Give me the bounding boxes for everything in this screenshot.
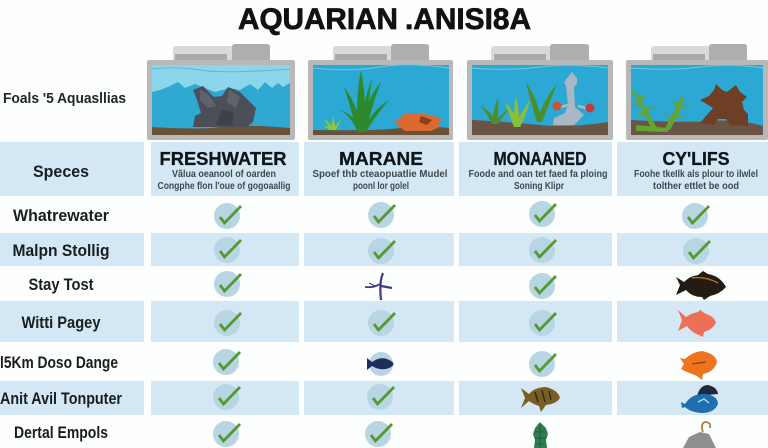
row label: aquarium row: Foals '5 Aquasllias — [3, 91, 126, 107]
column header: monaned: MONAANED — [494, 149, 586, 169]
column header: monaned — [468, 149, 608, 192]
row labels: Dertal Empols — [14, 424, 108, 442]
icon: purple creature — [365, 273, 392, 300]
column header: freshwater — [158, 149, 290, 192]
icon: black fish — [676, 271, 726, 300]
column header: cylifs — [634, 149, 758, 192]
icon: green plant — [533, 422, 548, 448]
row labels: l5Km Doso Dange — [0, 354, 118, 372]
aquarium: monaned — [467, 44, 613, 140]
column header: cylifs: tolther ettlet be ood — [653, 181, 739, 192]
row labels: Witti Pagey — [22, 314, 101, 332]
column header: freshwater: Congphe flon l'oue of gogoaallig — [158, 181, 290, 192]
checks: freshwater column — [213, 203, 241, 447]
column header: marine: Spoef thb cteaopuatlie Mudel — [312, 169, 448, 180]
checks: monaned column — [529, 201, 556, 377]
column header: marine — [312, 149, 448, 192]
column header: marine: MARANE — [339, 149, 423, 169]
title: .ANISI8A — [405, 3, 531, 36]
row labels: Stay Tost — [28, 276, 94, 294]
column header: monaned: Foode and oan tet faed fa ploing — [468, 169, 608, 180]
icon: dark blue fish — [367, 352, 394, 376]
icon: brown fish — [521, 387, 560, 412]
icon: coral fish — [678, 310, 716, 337]
icon: orange fish — [680, 351, 717, 380]
column header: monaned: Soning Klipr — [514, 181, 564, 192]
column header: marine: poonl lor golel — [353, 181, 409, 192]
row labels: Anit Avil Tonputer — [0, 390, 122, 408]
aquarium: freshwater — [147, 44, 295, 140]
column header: freshwater: Vãlua oeanool of oarden — [172, 169, 276, 180]
checks: cylifs column — [682, 203, 710, 264]
row labels: Whatrewater — [13, 207, 110, 225]
row labels: Malpn Stollig — [12, 242, 110, 260]
aquarium: marine — [308, 44, 453, 140]
checks: marine column — [365, 202, 395, 447]
panel: row bands — [0, 142, 768, 415]
row labels — [0, 207, 122, 442]
column header: freshwater: FRESHWATER — [160, 149, 286, 169]
header: species label: Speces — [33, 163, 89, 181]
icon: grey snail — [683, 422, 716, 448]
title — [238, 3, 531, 36]
title: AQUARIAN — [238, 3, 398, 36]
aquarium: cylifs — [626, 44, 768, 140]
column header: cylifs: CY'LIFS — [662, 149, 730, 169]
icon: blue fish — [681, 385, 718, 413]
